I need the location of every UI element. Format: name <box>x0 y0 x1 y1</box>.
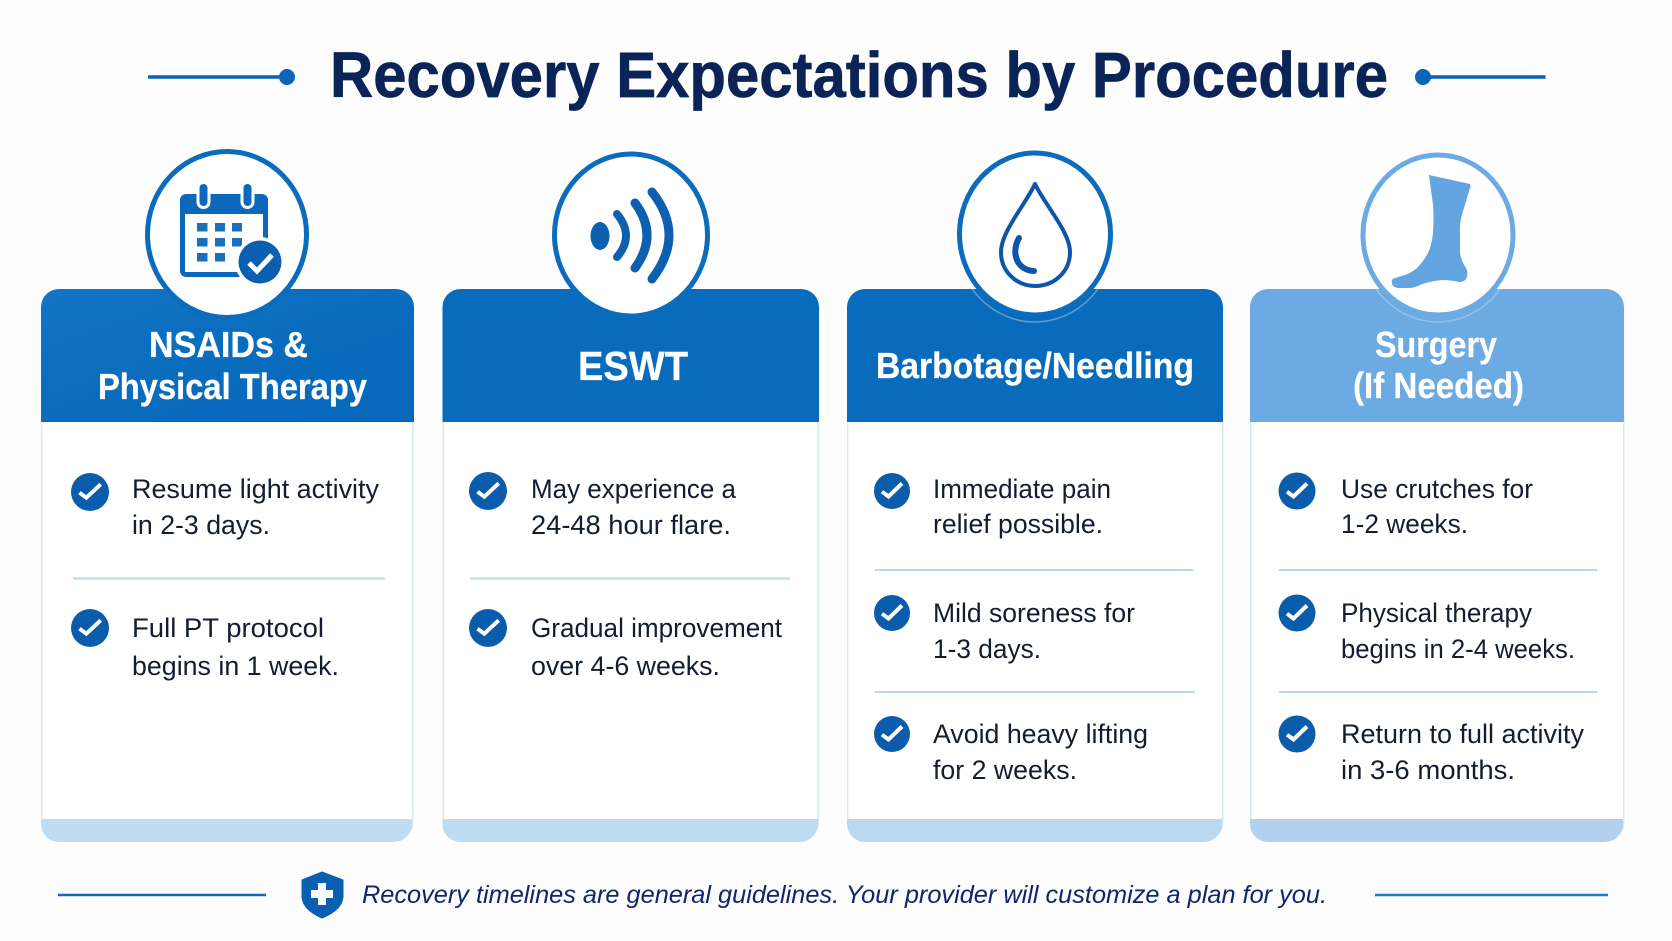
check item 1: Use crutches for <box>1341 474 1533 504</box>
panel: ESWT <box>442 154 819 842</box>
check item 2: Physical therapy <box>1341 598 1532 628</box>
check item 1 <box>469 472 737 540</box>
check item 3: Avoid heavy lifting <box>933 719 1148 749</box>
heading <box>98 324 367 407</box>
check item 2 <box>874 595 1135 664</box>
heading: Physical Therapy <box>98 366 367 407</box>
check item 2: over 4-6 weeks. <box>531 651 720 681</box>
header band <box>1250 289 1624 422</box>
check item 2 <box>1278 594 1575 664</box>
check item 1: Immediate pain <box>933 474 1111 504</box>
check item 1: May experience a <box>531 474 737 504</box>
heading: ESWT <box>578 343 688 389</box>
header band <box>847 289 1223 422</box>
heading: Surgery <box>1375 324 1497 365</box>
icon: droplet <box>956 153 1114 322</box>
header band <box>41 289 414 422</box>
footer rule right <box>1375 894 1608 896</box>
check item 1 <box>874 473 1111 539</box>
card body <box>42 400 413 840</box>
icon: shield with cross <box>302 872 343 918</box>
check item 2 <box>71 609 339 681</box>
footer rule left <box>58 894 266 896</box>
check item 3: in 3-6 months. <box>1341 755 1515 785</box>
icon: foot <box>1360 154 1516 322</box>
check item 2: Gradual improvement <box>531 613 782 643</box>
panel: Barbotage/Needling <box>847 153 1223 842</box>
check item 2: 1-3 days. <box>933 634 1041 664</box>
heading: Barbotage/Needling <box>876 345 1194 386</box>
footer band <box>442 819 818 842</box>
card body <box>443 400 818 840</box>
heading: NSAIDs & <box>149 324 308 365</box>
title: Recovery Expectations by Procedure <box>330 39 1388 111</box>
heading <box>1353 324 1524 406</box>
check item 1: 24-48 hour flare. <box>531 510 731 540</box>
check item 2 <box>469 609 782 681</box>
icon: shock waves <box>554 154 708 316</box>
check item 1: 1-2 weeks. <box>1341 509 1468 539</box>
footer band <box>847 819 1222 842</box>
check item 2: Full PT protocol <box>132 613 324 643</box>
check item 1 <box>71 473 379 540</box>
check item 3: for 2 weeks. <box>933 755 1077 785</box>
footer note: Recovery timelines are general guidelines. Your provider will customize a plan for you. <box>362 881 1327 909</box>
card body <box>1251 400 1624 840</box>
panel: NSAIDs and Physical Therapy <box>41 152 414 842</box>
check item 1: in 2-3 days. <box>132 510 270 540</box>
icon: calendar with check <box>148 152 306 318</box>
check item 3 <box>1278 716 1584 785</box>
check item 1: Resume light activity <box>132 474 379 504</box>
check item 1 <box>1278 472 1533 539</box>
check item 2: begins in 1 week. <box>132 651 339 681</box>
check item 1: relief possible. <box>933 509 1103 539</box>
check item 2: begins in 2-4 weeks. <box>1341 634 1575 664</box>
check item 2: Mild soreness for <box>933 598 1135 628</box>
title rule left <box>148 69 295 85</box>
footer band <box>1250 819 1623 842</box>
footer band <box>41 819 412 842</box>
check item 3 <box>874 716 1148 785</box>
heading: (If Needed) <box>1353 365 1524 406</box>
check item 3: Return to full activity <box>1341 719 1584 749</box>
header band <box>442 289 819 422</box>
card body <box>848 400 1223 840</box>
panel: Surgery <box>1250 154 1624 842</box>
title rule right <box>1415 69 1546 85</box>
